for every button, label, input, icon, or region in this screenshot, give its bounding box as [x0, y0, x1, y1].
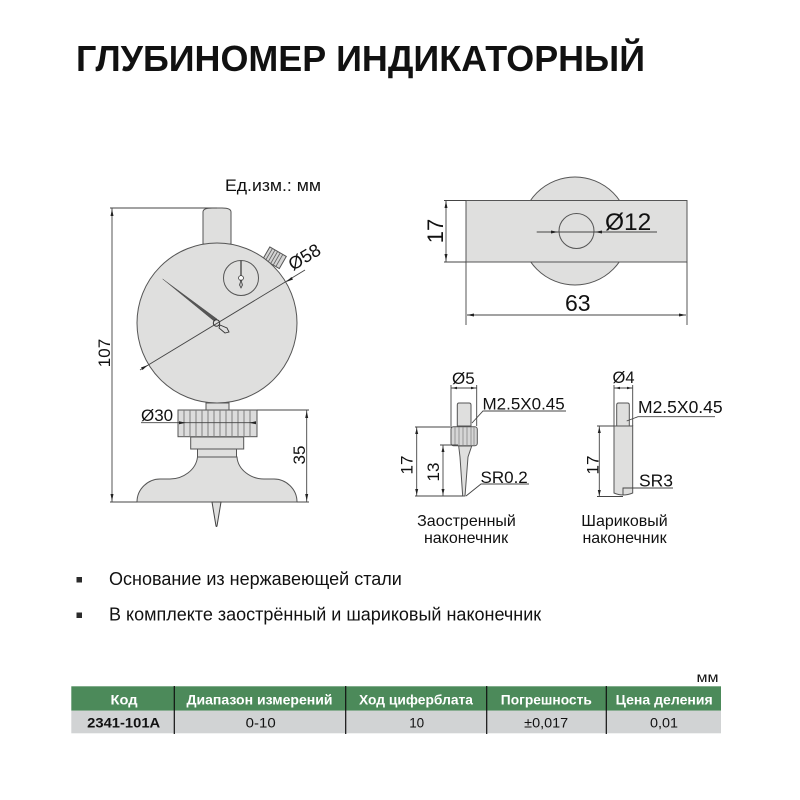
dimension: 17 ball tip	[584, 426, 623, 496]
dimension: diameter 5: Ø5	[452, 369, 475, 388]
neck	[206, 403, 229, 410]
dimension: 13 tip	[424, 445, 458, 496]
table header row: Погрешность	[501, 692, 592, 708]
table data row: 0,01	[650, 714, 678, 730]
center hole	[559, 214, 594, 248]
dimension: 63 width: 63	[565, 290, 591, 316]
dimension: 35: 35	[290, 446, 309, 464]
dimension: 63 width	[466, 262, 687, 325]
adjustment knob	[263, 247, 286, 269]
table data row	[71, 711, 721, 733]
specification table	[71, 686, 721, 734]
tip taper	[459, 446, 472, 496]
table header row	[71, 686, 721, 711]
gauge stem	[203, 208, 231, 244]
label: SR3	[623, 470, 673, 495]
label: thread: M2.5X0.45	[638, 397, 723, 417]
dimension: 107	[95, 208, 217, 502]
ball tip shank	[617, 403, 629, 426]
dimension: diameter 30	[141, 406, 256, 425]
dimension: 17 height	[423, 200, 466, 262]
dimension: diameter 12	[537, 209, 657, 236]
units note: Ед.изм.: мм	[225, 176, 321, 195]
table data row: ±0,017	[524, 714, 568, 730]
dimension: 35	[257, 410, 309, 502]
dimension: diameter 58: Ø58	[285, 240, 324, 274]
caption: ball tip: наконечник	[582, 530, 668, 547]
table header row: Ход циферблата	[359, 692, 473, 708]
table header row: Диапазон измерений	[186, 692, 332, 708]
label: SR3: SR3	[639, 470, 673, 490]
diagram: gauge base top view	[423, 177, 687, 325]
dimension: diameter 4: Ø4	[612, 369, 635, 387]
dimension: diameter 30: Ø30	[141, 406, 173, 425]
small dial	[224, 260, 258, 296]
dimension: 17 height: 17	[423, 219, 448, 243]
tip shank	[457, 403, 471, 426]
ball tip body	[614, 426, 633, 495]
table units: мм	[696, 669, 718, 685]
dimension: diameter 12: Ø12	[605, 209, 651, 236]
caption: pointed tip: Заостренный	[417, 513, 516, 530]
dimension: diameter 4	[612, 369, 635, 426]
diagram: pointed tip	[398, 369, 566, 547]
circular body behind base	[521, 177, 629, 285]
label: thread: M2.5X0.45	[482, 394, 565, 414]
feature bullet: base: Основание из нержавеющей стали	[109, 569, 402, 589]
label: SR0.2	[466, 468, 529, 496]
title: ГЛУБИНОМЕР ИНДИКАТОРНЫЙ	[76, 37, 645, 79]
dimension: diameter 58	[140, 240, 324, 370]
dial face	[137, 243, 297, 403]
table header row: Цена деления	[616, 692, 713, 708]
table data row: 10	[409, 714, 424, 730]
dimension: 17 tip	[398, 427, 463, 496]
dimension: 107: 107	[95, 339, 114, 367]
knurled ring	[178, 410, 257, 437]
tip knurl	[451, 427, 477, 446]
dimension: 17 ball tip: 17	[584, 456, 602, 474]
pointed tip	[212, 502, 221, 526]
base foot	[137, 457, 297, 502]
table header row: Код	[110, 692, 138, 708]
label: thread	[472, 394, 566, 423]
table data row: 2341-101A	[87, 714, 160, 730]
base plate	[466, 200, 687, 262]
dimension: diameter 5	[451, 369, 477, 426]
dimension: 13 tip: 13	[424, 463, 443, 481]
main needle	[163, 279, 229, 333]
feature bullet: tips: В комплекте заострённый и шариковый наконечник	[109, 604, 541, 624]
diagram: ball tip	[581, 369, 723, 547]
caption: ball tip: Шариковый	[581, 513, 668, 530]
table data row: 0-10	[246, 714, 276, 730]
dimension: 17 tip: 17	[398, 456, 416, 474]
caption: pointed tip: наконечник	[424, 530, 509, 547]
collars	[191, 437, 244, 457]
diagram: depth gauge front view	[137, 208, 297, 526]
label: SR0.2: SR0.2	[480, 468, 528, 487]
